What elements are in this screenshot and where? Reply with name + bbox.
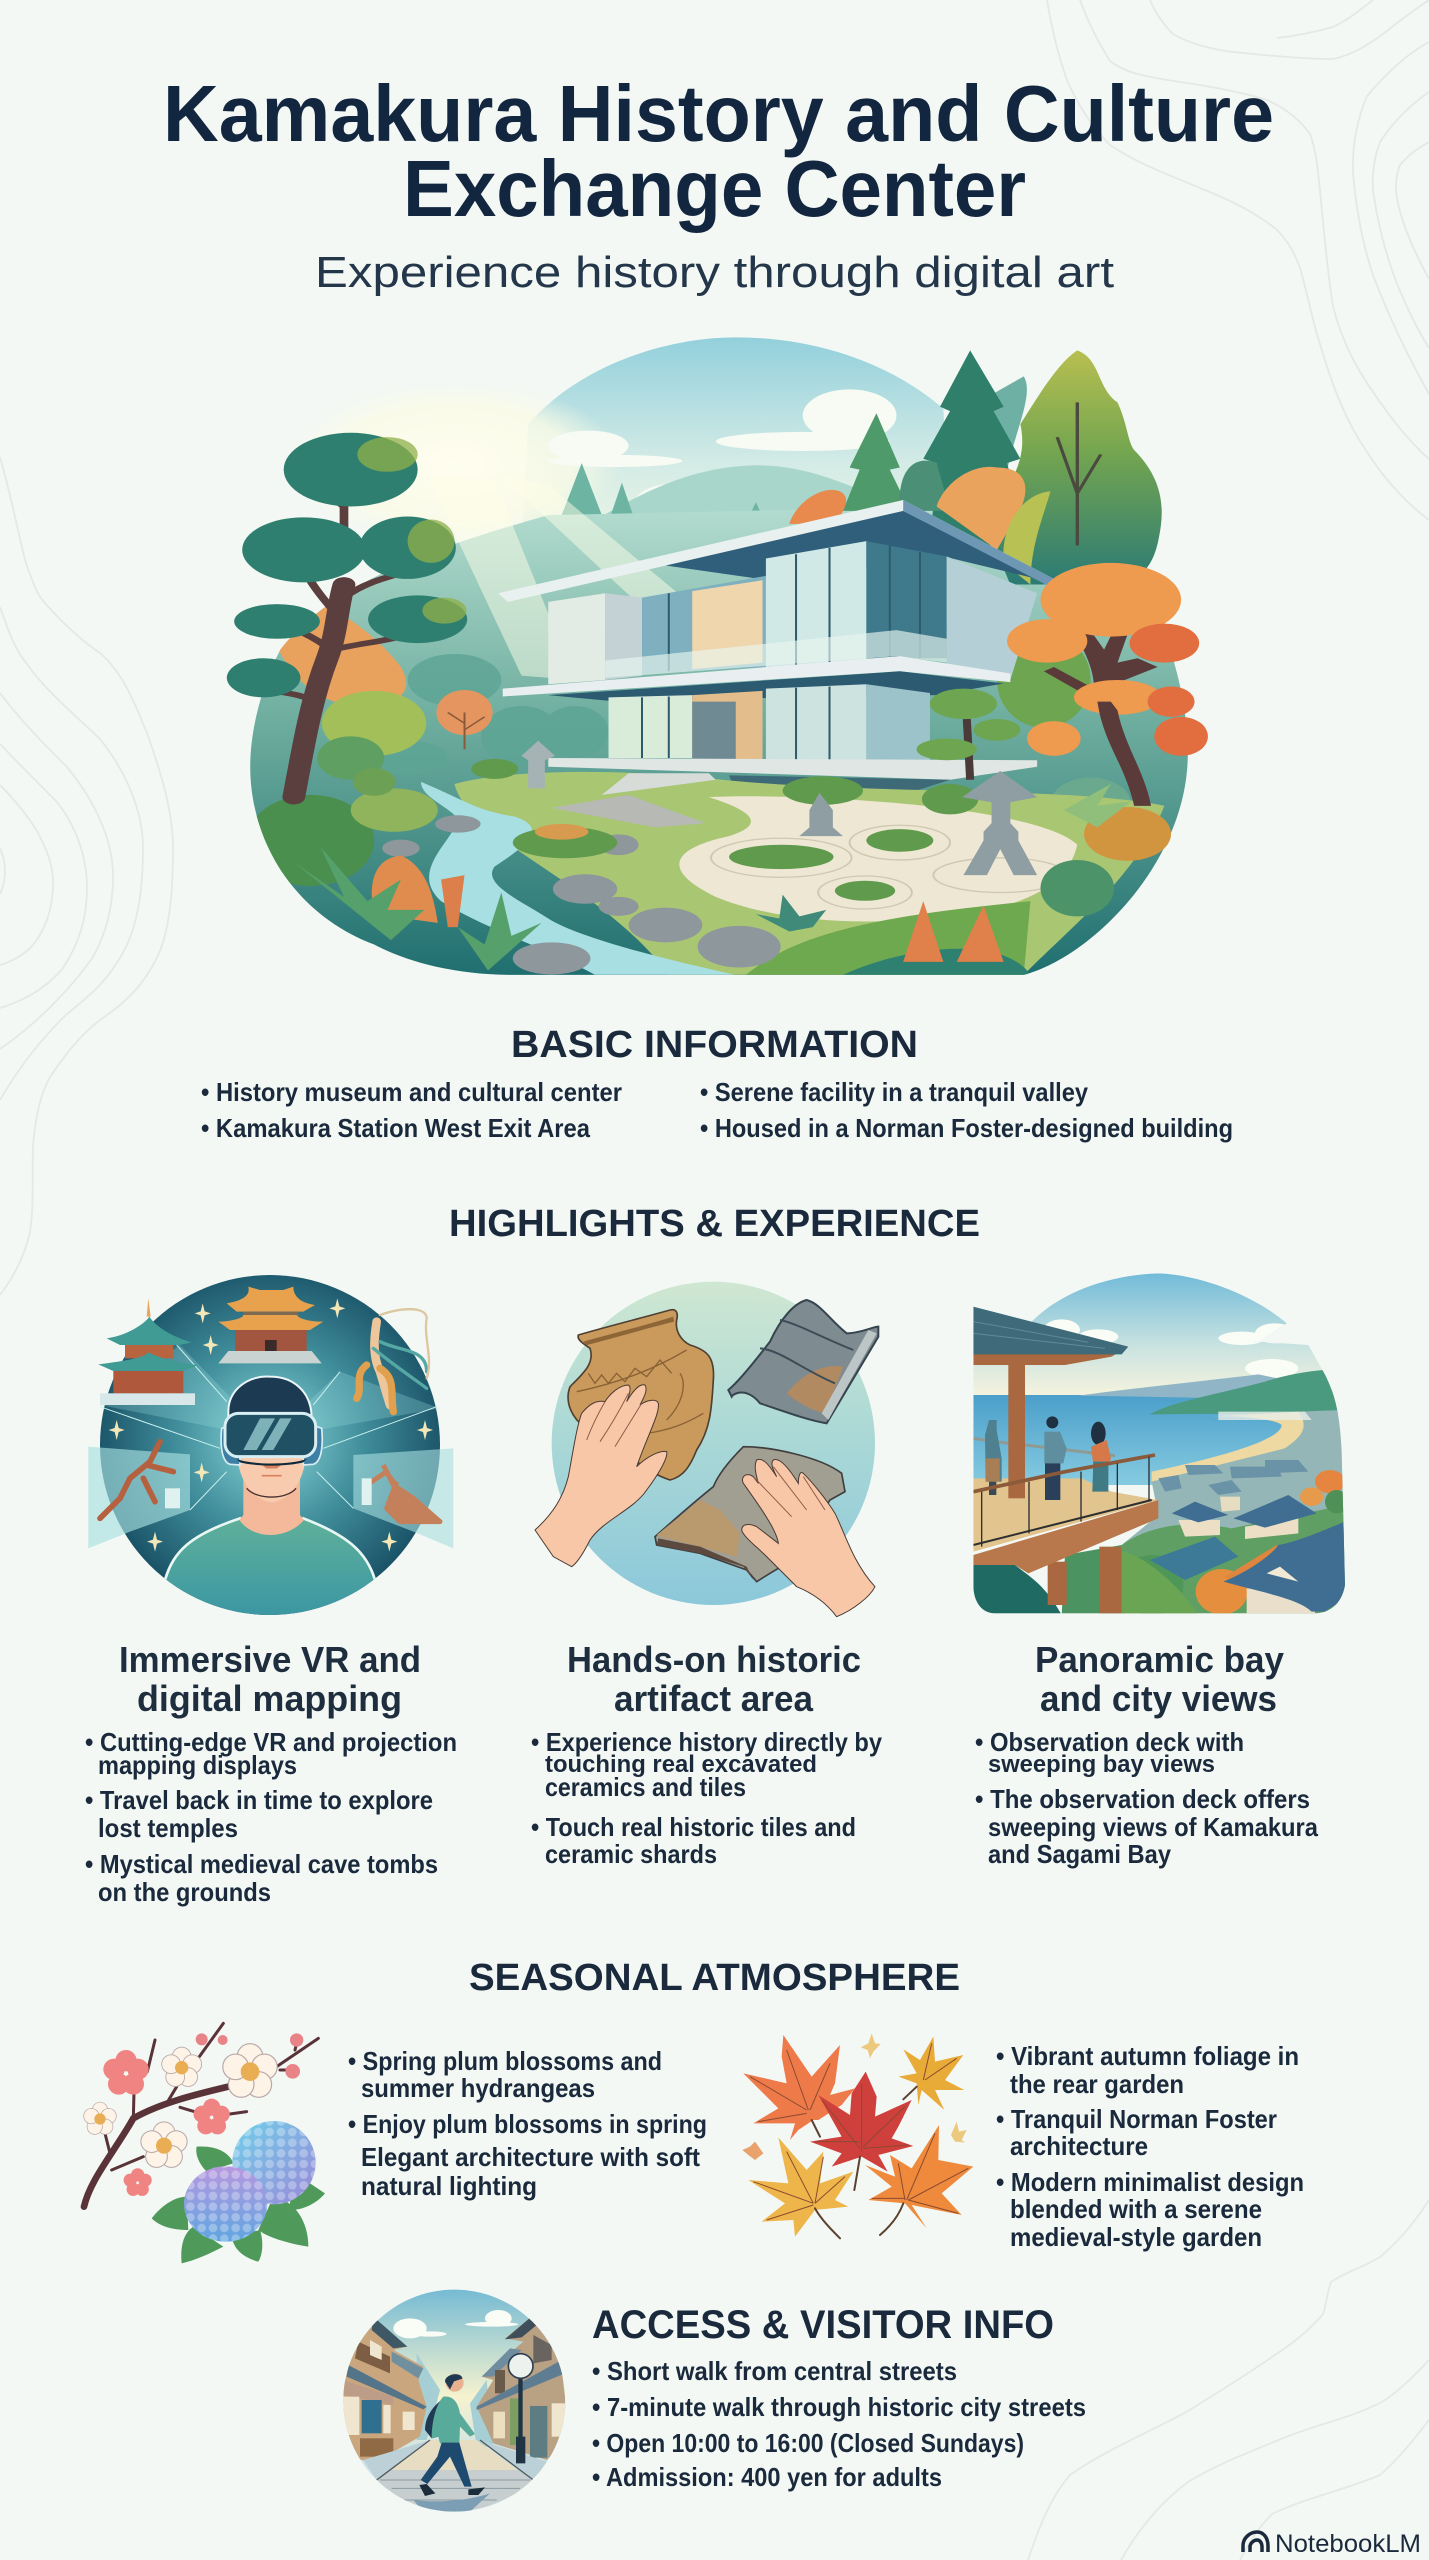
bullets: artifacts: touching real excavated xyxy=(545,1751,817,1778)
seasonal autumn text: blended with a serene xyxy=(1010,2194,1262,2224)
seasonal autumn text: the rear garden xyxy=(1010,2069,1184,2099)
seasonal spring text: Elegant architecture with soft xyxy=(361,2142,700,2172)
access heading and info: ACCESS & VISITOR INFO xyxy=(592,2303,1054,2347)
bullets: views: and Sagami Bay xyxy=(988,1839,1171,1869)
bullets: views: sweeping bay views xyxy=(988,1751,1215,1778)
seasonal autumn text: architecture xyxy=(1010,2131,1148,2161)
bullets: views xyxy=(975,1727,1318,1869)
access bullets: • Open 10:00 to 16:00 (Closed Sundays) xyxy=(592,2428,1024,2458)
icon: hands touching historic pottery and tiles xyxy=(535,1282,878,1617)
bullets: artifacts: ceramic shards xyxy=(545,1839,717,1869)
pine tree at left xyxy=(227,433,467,797)
title: Exchange Center xyxy=(403,144,1026,233)
access bullets: • Short walk from central streets xyxy=(592,2356,957,2386)
seasonal autumn text: • Modern minimalist design xyxy=(996,2167,1304,2197)
bullets: VR: • Mystical medieval cave tombs xyxy=(85,1849,438,1879)
basic information right bullets: • Serene facility in a tranquil valley xyxy=(700,1077,1088,1107)
mid forest bushes xyxy=(247,596,1131,886)
bullets: artifacts xyxy=(531,1727,882,1869)
bullets: VR: mapping displays xyxy=(98,1750,297,1780)
heading: highlights and experience: HIGHLIGHTS & EXPERIENCE xyxy=(449,1203,980,1245)
icon: panoramic bay and city from observation deck xyxy=(972,1272,1348,1615)
card: panoramic views text: and city views xyxy=(1040,1678,1277,1719)
seasonal spring text: natural lighting xyxy=(361,2171,537,2201)
icon: NotebookLM logo xyxy=(1243,2532,1268,2552)
bullets: VR: • Cutting-edge VR and projection xyxy=(85,1727,457,1757)
seasonal spring text xyxy=(348,2046,707,2201)
seasonal autumn text: • Tranquil Norman Foster xyxy=(996,2104,1277,2134)
seasonal autumn text: medieval-style garden xyxy=(1010,2222,1262,2252)
heading: seasonal atmosphere: SEASONAL ATMOSPHERE xyxy=(469,1957,960,1999)
seasonal spring text: • Spring plum blossoms and xyxy=(348,2046,662,2076)
card: immersive VR text: digital mapping xyxy=(137,1678,402,1719)
seasonal spring text: summer hydrangeas xyxy=(361,2073,595,2103)
seasonal spring text: • Enjoy plum blossoms in spring xyxy=(348,2109,707,2139)
icon: autumn maple leaves xyxy=(742,2033,973,2238)
card: hands-on artifact text xyxy=(531,1639,882,1869)
bullets: artifacts: • Experience history directly by xyxy=(531,1727,882,1757)
bullets: VR: on the grounds xyxy=(98,1877,271,1907)
heading: basic information: BASIC INFORMATION xyxy=(511,1024,918,1066)
bullets: views: sweeping views of Kamakura xyxy=(988,1812,1318,1842)
basic information right bullets: • Housed in a Norman Foster-designed building xyxy=(700,1113,1233,1143)
card: hands-on artifact text: artifact area xyxy=(614,1678,814,1719)
subtitle: Experience history through digital art xyxy=(315,248,1114,297)
bullets: views: • The observation deck offers xyxy=(975,1784,1310,1814)
orange maple tree at right xyxy=(917,563,1208,861)
rocks and moss xyxy=(382,759,1067,974)
bullets: VR xyxy=(85,1727,457,1907)
title: Kamakura History and Culture xyxy=(163,69,1274,158)
foreground plants xyxy=(294,784,1131,971)
access heading and info xyxy=(592,2303,1086,2492)
icon: plum blossoms and hydrangeas xyxy=(84,2023,325,2263)
access bullets: • 7-minute walk through historic city streets xyxy=(592,2392,1086,2422)
icon: person in VR headset with digital scenes xyxy=(88,1275,453,1618)
brand label: NotebookLM xyxy=(1275,2530,1421,2558)
building xyxy=(498,500,1061,795)
bullets: views: • Observation deck with xyxy=(975,1727,1244,1757)
card: panoramic views text xyxy=(975,1639,1318,1869)
garden ground xyxy=(421,772,1164,975)
title xyxy=(163,69,1274,233)
card: panoramic views text: Panoramic bay xyxy=(1035,1639,1284,1680)
icon: traveler walking through historic street xyxy=(340,2287,570,2517)
tall trees behind xyxy=(789,350,1162,585)
basic information right bullets xyxy=(700,1077,1233,1143)
bullets: VR: lost temples xyxy=(98,1813,238,1843)
card: immersive VR text: Immersive VR and xyxy=(119,1639,421,1680)
illustration: modern building in a Japanese garden xyxy=(227,337,1208,975)
seasonal autumn text xyxy=(996,2041,1304,2252)
basic information left bullets xyxy=(201,1077,622,1143)
basic information left bullets: • History museum and cultural center xyxy=(201,1077,622,1107)
card: hands-on artifact text: Hands-on historic xyxy=(567,1639,861,1680)
access bullets xyxy=(592,2356,1086,2492)
stone lanterns xyxy=(521,741,1037,875)
bullets: VR: • Travel back in time to explore xyxy=(85,1785,433,1815)
seasonal autumn text: • Vibrant autumn foliage in xyxy=(996,2041,1299,2071)
bullets: artifacts: ceramics and tiles xyxy=(545,1772,746,1802)
basic information left bullets: • Kamakura Station West Exit Area xyxy=(201,1113,590,1143)
card: immersive VR text xyxy=(85,1639,457,1907)
bullets: artifacts: • Touch real historic tiles and xyxy=(531,1812,856,1842)
access bullets: • Admission: 400 yen for adults xyxy=(592,2462,942,2492)
